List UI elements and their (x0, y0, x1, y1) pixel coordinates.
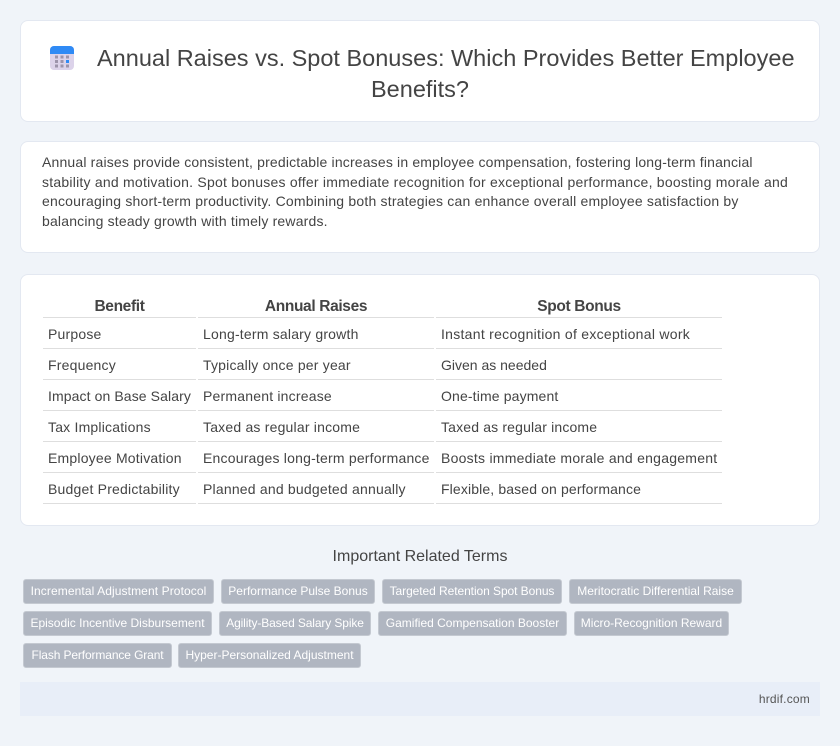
tag: Agility-Based Salary Spike (226, 616, 364, 630)
row: Impact on Base Salary: Permanent increase (203, 388, 332, 404)
title (97, 45, 795, 102)
tag: Episodic Incentive Disbursement (30, 616, 205, 630)
header: Benefit: Benefit (94, 298, 145, 315)
title: Benefits? (371, 76, 469, 102)
tag (382, 579, 562, 604)
row: Purpose: Instant recognition of exceptional work (441, 326, 690, 342)
row: Impact on Base Salary: One-time payment (441, 388, 558, 404)
tag (574, 611, 729, 636)
row: Impact on Base Salary: Impact on Base Salary (48, 388, 191, 404)
panel: introduction (20, 141, 820, 253)
row: Tax Implications: Tax Implications (48, 419, 151, 435)
panel: comparison table (20, 274, 820, 526)
row: Frequency (48, 357, 547, 373)
text block: introduction: encouraging short-term productivity. Combining both strategies can enhance overall employee satisfaction by (42, 193, 739, 209)
row: Purpose (48, 326, 690, 342)
tag: Gamified Compensation Booster (386, 616, 559, 630)
row: Tax Implications: Taxed as regular income (441, 419, 597, 435)
row: Budget Predictability: Planned and budgeted annually (203, 481, 406, 497)
tag (23, 611, 212, 636)
heading: related terms: Important Related Terms (333, 548, 507, 565)
tag (569, 579, 742, 604)
row: Frequency: Frequency (48, 357, 116, 373)
row: Tax Implications: Taxed as regular income (203, 419, 360, 435)
row: Employee Motivation (48, 450, 718, 466)
tag: Performance Pulse Bonus (228, 584, 368, 598)
text block: introduction: balancing steady growth with timely rewards. (42, 212, 328, 228)
header: Annual Raises: Annual Raises (265, 298, 367, 315)
tag (378, 611, 567, 636)
row: Employee Motivation: Employee Motivation (48, 450, 182, 466)
row: Budget Predictability: Budget Predictability (48, 481, 180, 497)
table: comparison (43, 298, 722, 504)
header: Spot Bonus: Spot Bonus (537, 298, 621, 315)
row: Employee Motivation: Encourages long-term performance (203, 450, 430, 466)
title: Annual Raises vs. Spot Bonuses: Which Provides Better Employee (97, 45, 795, 71)
row: Purpose: Long-term salary growth (203, 326, 359, 342)
row: Budget Predictability (48, 481, 641, 497)
row: Purpose: Purpose (48, 326, 102, 342)
tag (23, 579, 214, 604)
tag: Targeted Retention Spot Bonus (390, 584, 554, 598)
tag (178, 643, 361, 668)
row: Frequency: Typically once per year (203, 357, 351, 373)
tag: Flash Performance Grant (32, 648, 163, 662)
row: Frequency: Given as needed (441, 357, 547, 373)
tag: Meritocratic Differential Raise (577, 584, 734, 598)
tag (23, 643, 172, 668)
text block: introduction: stability and motivation. Spot bonuses offer immediate recognition for exceptional performance, boosting morale and (42, 174, 788, 190)
footer (20, 682, 820, 716)
tag: Hyper-Personalized Adjustment (185, 648, 354, 662)
tags: related terms (23, 579, 742, 668)
tag (221, 579, 375, 604)
icon: calendar (50, 46, 74, 70)
tag: Micro-Recognition Reward (581, 616, 722, 630)
text block: introduction: Annual raises provide consistent, predictable increases in employee compensation, fostering long-term financial (42, 154, 753, 170)
tag (219, 611, 371, 636)
footer: hrdif.com (759, 692, 810, 706)
row: Employee Motivation: Boosts immediate morale and engagement (441, 450, 717, 466)
row: Budget Predictability: Flexible, based on performance (441, 481, 641, 497)
text block: introduction (42, 154, 788, 229)
row: Tax Implications (48, 419, 597, 435)
row: Impact on Base Salary (48, 388, 558, 404)
panel: header (20, 20, 820, 122)
tag: Incremental Adjustment Protocol (31, 584, 206, 598)
